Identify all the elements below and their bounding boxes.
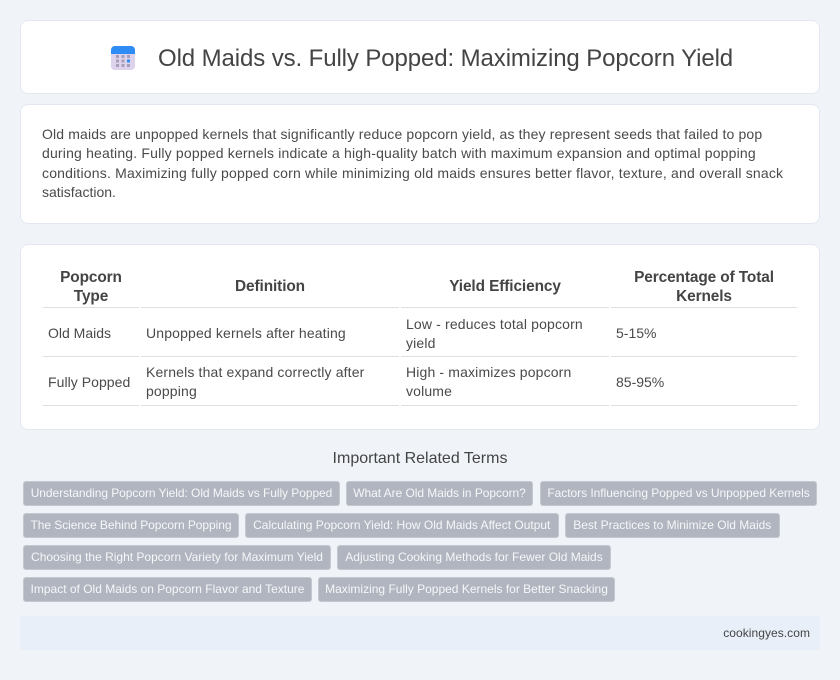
table: popping [146,383,197,399]
table: Kernels [676,288,732,305]
related term tags: Understanding Popcorn Yield: Old Maids vs Fully Popped [31,486,332,500]
table: yield [406,335,436,351]
icon: calendar [111,46,135,70]
row: fully popped: Fully Popped [48,374,130,390]
table: High - maximizes popcorn [406,364,571,380]
related term tags: Calculating Popcorn Yield: How Old Maids Affect Output [253,518,550,532]
table: 5-15% [616,325,656,341]
intro text: Old maids are unpopped kernels that significantly reduce popcorn yield, as they represent seeds that failed to pop [42,126,762,142]
related term tags: Maximizing Fully Popped Kernels for Better Snacking [325,582,608,596]
related term tags: Factors Influencing Popped vs Unpopped Kernels [547,486,810,500]
related term tags: What Are Old Maids in Popcorn? [353,486,526,500]
footer source text: cookingyes.com [723,626,810,640]
intro text: conditions. Maximizing fully popped corn while minimizing old maids ensures better flavor, texture, and overall snack [42,165,783,181]
table: volume [406,383,452,399]
footer [20,616,820,650]
related term tags: Choosing the Right Popcorn Variety for Maximum Yield [31,550,323,564]
row: old maids: Old Maids [48,325,111,341]
panel: introduction [20,104,820,224]
related term tags: Impact of Old Maids on Popcorn Flavor and Texture [31,582,304,596]
related term tags: Adjusting Cooking Methods for Fewer Old Maids [345,550,603,564]
intro text: satisfaction. [42,184,116,200]
table [43,269,797,406]
intro text [42,126,783,200]
header panel [20,20,820,94]
table header: Type [74,288,108,305]
table header: Popcorn [60,269,122,286]
table: Percentage of Total [634,269,774,286]
table: Low - reduces total popcorn [406,316,583,332]
intro text: during heating. Fully popped kernels indicate a high-quality batch with maximum expansion and optimal popping [42,145,756,161]
table header [60,269,122,305]
related term tags [23,481,817,602]
table: Kernels that expand correctly after [146,364,364,380]
table: Yield Efficiency [449,278,561,295]
related term tags: Best Practices to Minimize Old Maids [573,518,771,532]
table: Definition [235,278,305,295]
related term tags: The Science Behind Popcorn Popping [30,518,232,532]
panel: comparison table [20,244,820,430]
title: Old Maids vs. Fully Popped: Maximizing Popcorn Yield [158,45,733,72]
table: Unpopped kernels after heating [146,325,346,341]
table: 85-95% [616,374,664,390]
heading: related terms: Important Related Terms [333,450,507,467]
